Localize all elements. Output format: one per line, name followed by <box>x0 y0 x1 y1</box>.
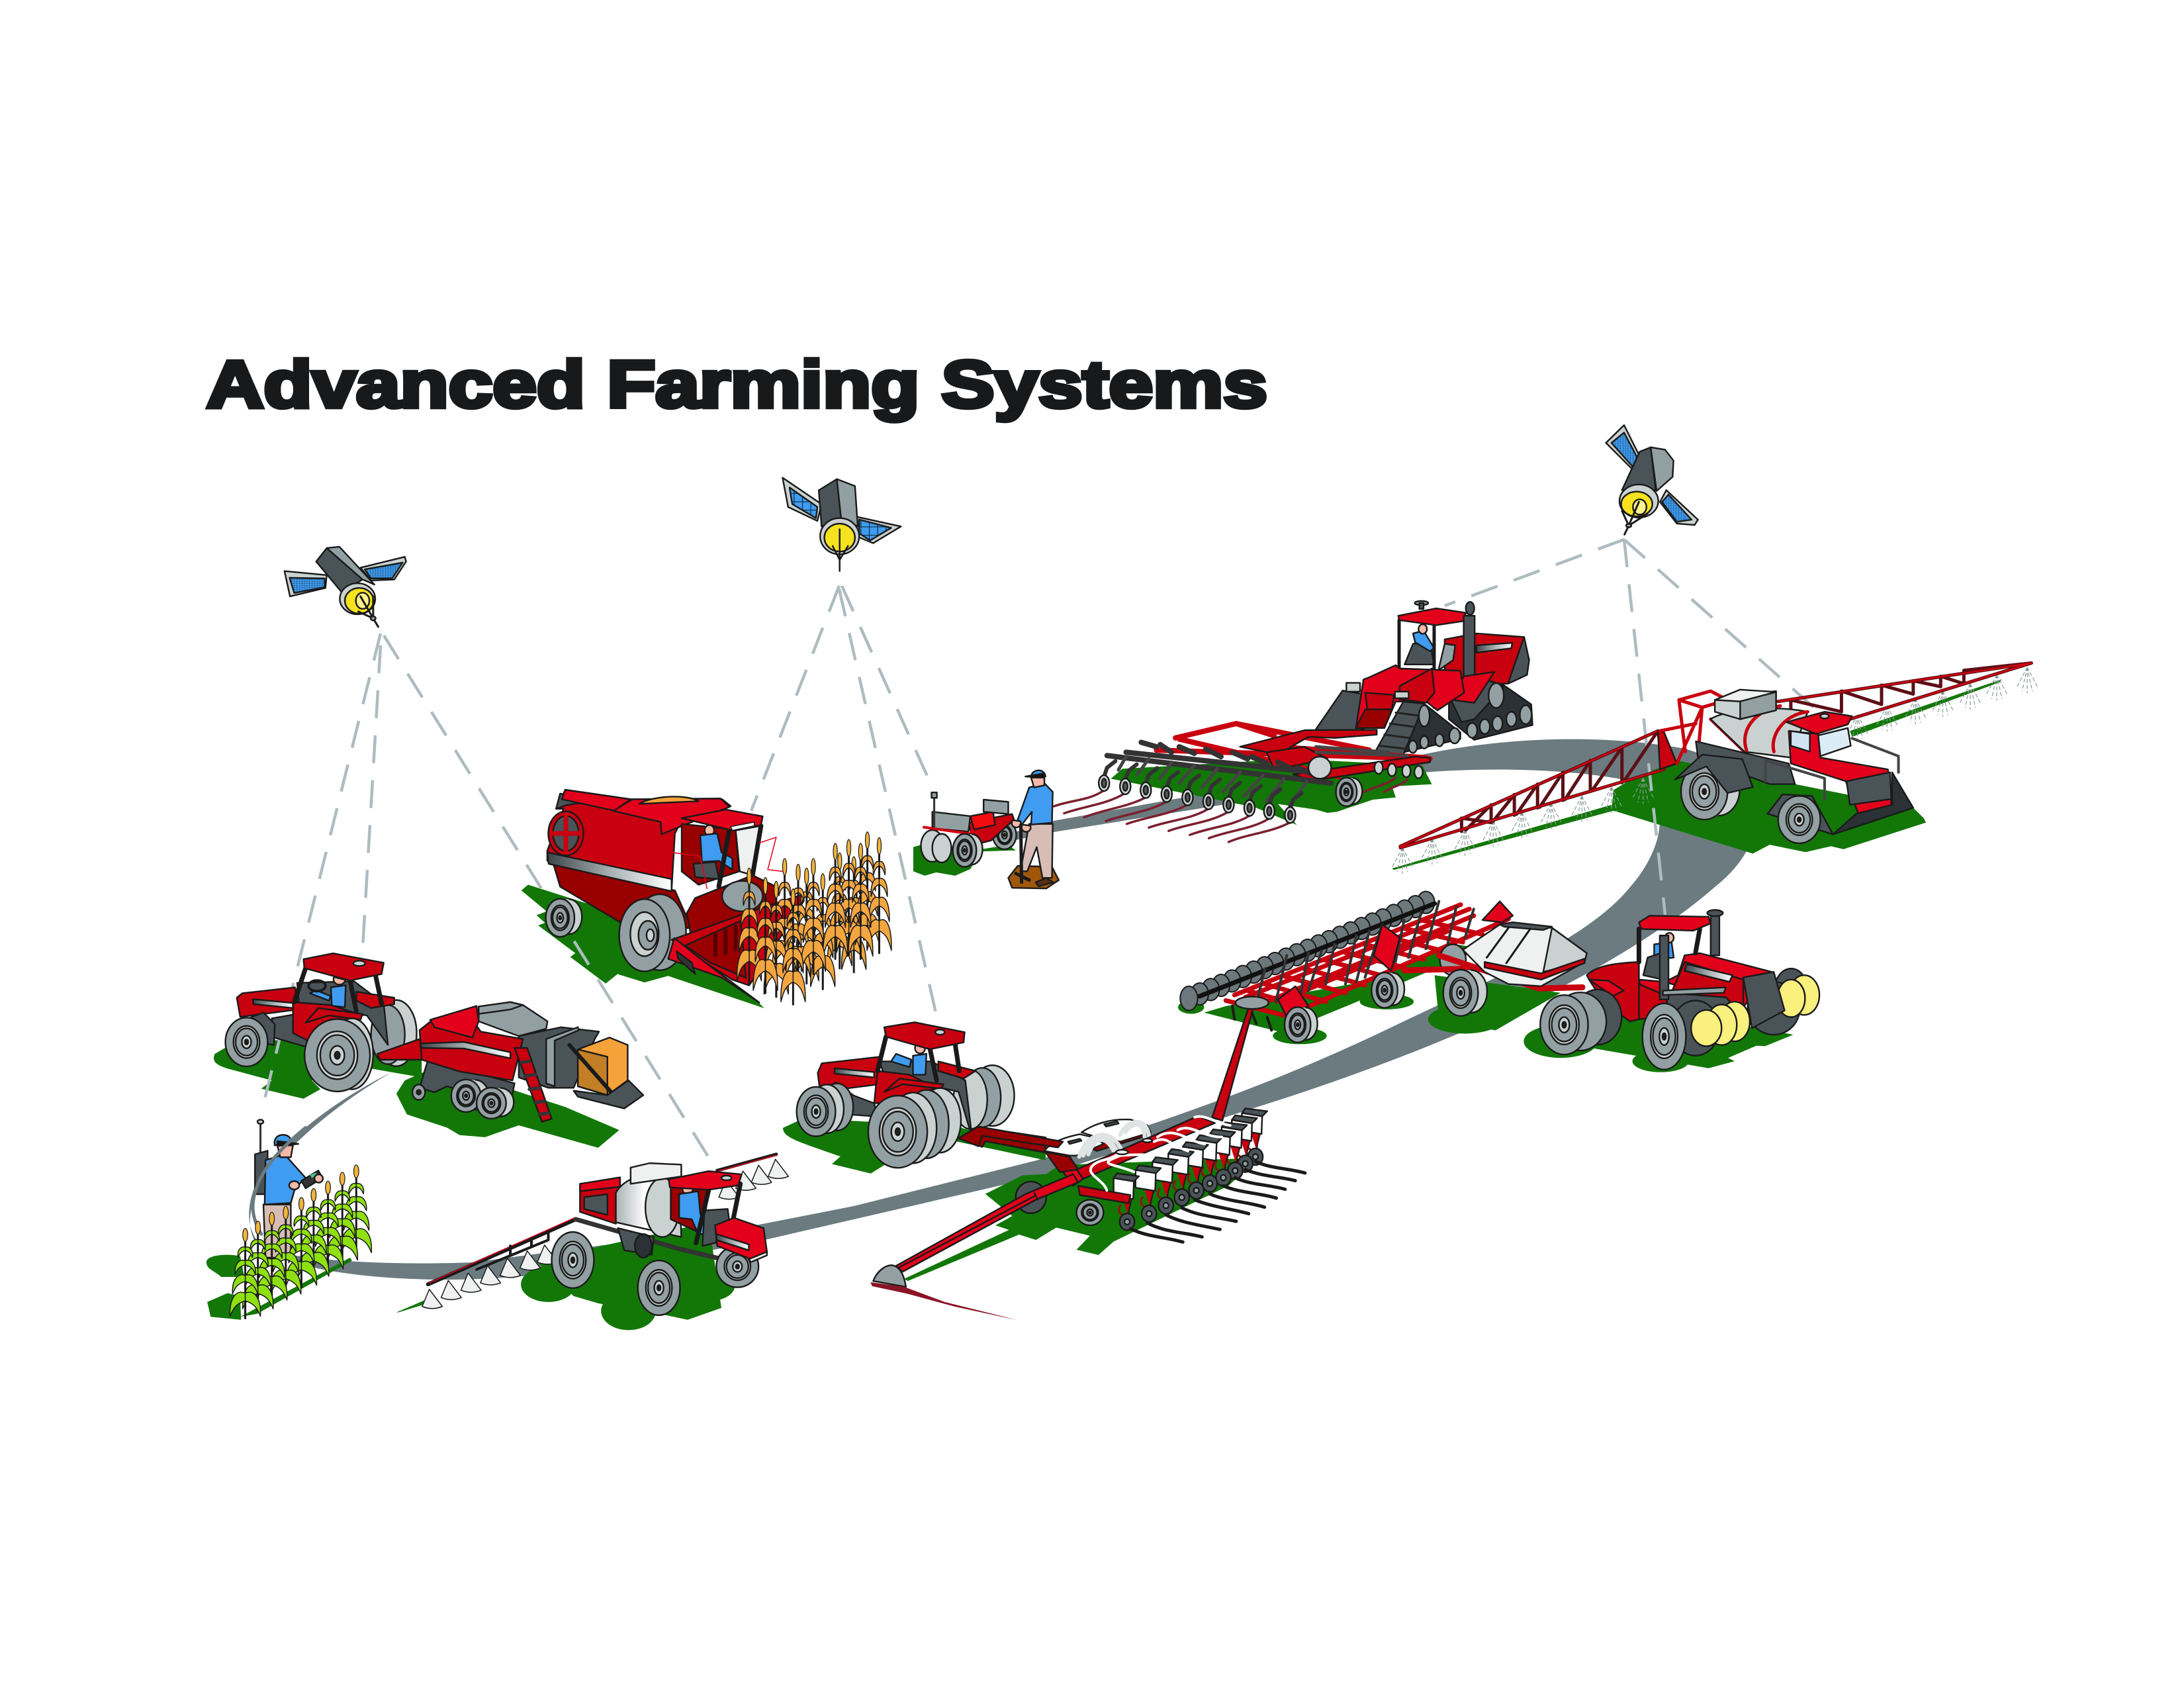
marker arm <box>1212 1002 1255 1121</box>
cab <box>1639 929 1700 962</box>
dark bars and tines <box>1107 742 1331 783</box>
chassis <box>1696 741 1795 784</box>
planter tractor <box>797 1022 1046 1168</box>
cab <box>670 1187 709 1234</box>
front dual wheels <box>1574 990 1621 1045</box>
rear body <box>1587 962 1639 1021</box>
handheld device <box>301 1170 322 1188</box>
red baler body <box>420 1018 523 1080</box>
roof <box>884 1022 965 1049</box>
front wheel <box>633 894 686 970</box>
yellow far tank <box>1789 975 1819 1015</box>
lower hull <box>553 864 692 929</box>
cart tank <box>1463 925 1587 986</box>
tower <box>1660 691 1745 763</box>
satellite 2 <box>782 478 901 571</box>
spray mist left <box>1392 778 1654 873</box>
cab side <box>293 1002 363 1041</box>
tongue end dome and furrow <box>873 1265 906 1287</box>
frame <box>576 1219 753 1266</box>
planter row units <box>1114 1108 1267 1230</box>
quad-track tractor rear <box>1398 601 1533 740</box>
yellow weight tanks <box>1719 1002 1750 1041</box>
operator <box>308 974 345 1007</box>
operator <box>891 1043 927 1075</box>
cab interior <box>879 1061 972 1137</box>
ground patches under machines <box>206 679 2002 1330</box>
main body <box>547 790 731 890</box>
chamber <box>519 1027 599 1088</box>
antenna and backpack <box>259 1123 261 1158</box>
rear small wheel <box>546 899 582 937</box>
left nozzles <box>537 1245 558 1264</box>
rear drum <box>548 812 584 855</box>
hitch <box>960 1128 1046 1152</box>
corn stalks orange <box>737 832 891 1004</box>
disc gangs <box>1180 892 1435 1010</box>
wheels <box>226 1017 267 1066</box>
tillage implement <box>1054 724 1430 842</box>
pants <box>263 1205 291 1258</box>
tongue <box>377 1039 424 1060</box>
corn row green <box>230 1165 371 1318</box>
tongue <box>896 1174 1078 1272</box>
grille <box>1743 972 1785 1028</box>
quad-track tractor front <box>1316 665 1464 755</box>
air seeder and cart <box>1180 892 1587 1043</box>
wheels <box>993 821 1017 849</box>
rear red frame <box>1156 724 1430 776</box>
seeder tractor <box>1540 910 1819 1070</box>
drawbar <box>1240 729 1377 755</box>
transport wheel <box>1016 1182 1046 1213</box>
man with soil probe <box>1009 771 1059 888</box>
square baler <box>377 1002 643 1122</box>
soil patch <box>1009 866 1059 888</box>
satellite signal lines <box>261 539 1814 1170</box>
hood <box>1665 953 1772 1007</box>
operator <box>694 825 733 879</box>
dish marker <box>1236 997 1269 1009</box>
far rear wheels <box>970 1065 1015 1126</box>
rear nozzles <box>768 1159 788 1178</box>
nose <box>715 1218 767 1259</box>
cart frame <box>1404 955 1582 988</box>
hood <box>818 1057 879 1092</box>
cab interior <box>297 982 388 1045</box>
rear wheel and fender <box>1681 763 1739 820</box>
soil sampler with backpack antenna <box>230 1119 371 1318</box>
seeder wheels <box>1285 1007 1318 1043</box>
grain tank <box>612 798 729 834</box>
hood <box>237 988 298 1017</box>
rear track <box>1449 678 1533 740</box>
right boom truss <box>1778 663 2031 719</box>
spray mist right <box>1846 667 2038 740</box>
corn header <box>672 894 803 986</box>
cab and hood <box>1789 731 1892 814</box>
left boom <box>428 1219 576 1284</box>
harrow row <box>1099 761 1302 823</box>
title: Advanced Farming Systems <box>206 348 1267 422</box>
furrows <box>1054 778 1407 842</box>
gray boxes <box>983 800 1009 814</box>
satellite 1 <box>285 547 406 627</box>
rear far wheels <box>1774 968 1809 1017</box>
cab <box>682 824 739 885</box>
tank <box>1711 708 1807 757</box>
furrow trails <box>1130 1161 1305 1242</box>
road: curved grey field path <box>249 739 1756 1280</box>
grille and bumper <box>1846 773 1891 805</box>
shirt <box>265 1154 306 1205</box>
planter implement <box>870 1002 1305 1320</box>
tank box and rear <box>580 1181 620 1224</box>
red frame <box>1226 905 1508 1016</box>
left boom truss <box>1400 731 1664 848</box>
seat and cab rear <box>1438 644 1455 671</box>
shanks <box>1232 1006 1271 1030</box>
wheels and chassis <box>420 1060 514 1104</box>
hopper tanks <box>1046 1152 1080 1172</box>
large sprayer <box>1392 663 2038 873</box>
red main bar <box>958 1127 1063 1147</box>
frame uprights <box>1256 902 1474 1004</box>
rear reel discs <box>1375 761 1423 778</box>
combine harvester <box>546 790 891 1004</box>
cab side <box>874 1071 936 1103</box>
baler tractor <box>226 953 417 1092</box>
small scouting tractor <box>921 792 1017 867</box>
small self-propelled sprayer <box>422 1154 788 1315</box>
rear far wheel <box>376 1000 417 1066</box>
ladder <box>514 1048 552 1122</box>
gray top blocks <box>478 1002 547 1036</box>
front wheel <box>1768 794 1833 834</box>
satellite 3 <box>1606 425 1698 534</box>
wheels <box>716 1246 758 1288</box>
bale <box>578 1037 627 1095</box>
front track <box>1403 704 1461 752</box>
seed tubes <box>1091 1117 1230 1190</box>
exhaust <box>1711 914 1719 955</box>
big rear dual <box>919 1088 961 1152</box>
front dual wheel <box>821 1084 853 1131</box>
hand rails <box>1766 738 1899 799</box>
roof <box>304 953 384 980</box>
antenna <box>933 794 935 827</box>
silver stripe <box>547 853 672 891</box>
